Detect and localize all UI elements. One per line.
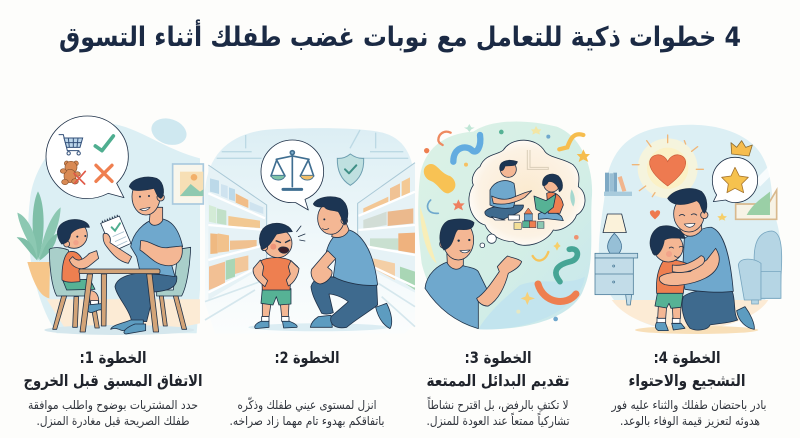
- step 1 heading: الخطوة 1:: [80, 348, 146, 367]
- icon: balance scale: [271, 151, 314, 189]
- step 3 text: [426, 348, 570, 429]
- toy blocks: [514, 208, 544, 229]
- step 4 heading: الخطوة 4:: [654, 348, 720, 367]
- decorative squiggles and stars: [424, 124, 590, 321]
- figure: father hugging: [668, 189, 754, 330]
- floor lines: [205, 282, 415, 327]
- step 4 description line 1: بادر باحتضان طفلك والثناء عليه فور: [611, 398, 766, 413]
- plant: [17, 191, 61, 298]
- small plant: [570, 189, 575, 207]
- ceiling lights: [217, 130, 408, 158]
- dresser: [595, 253, 638, 305]
- crown: [731, 141, 752, 156]
- figure: child hugging: [650, 226, 687, 331]
- left shelves: [208, 165, 267, 300]
- figure: father: [111, 177, 183, 334]
- small cloud blob: [148, 114, 190, 149]
- armchair: [738, 231, 782, 304]
- shout marks: [297, 226, 305, 241]
- step 2 description line 2: باتفاقكم بهدوء تام مهما زاد صراخه.: [230, 414, 384, 429]
- notepad: [101, 215, 132, 263]
- background blob: [599, 125, 781, 330]
- floor shadow: [248, 323, 388, 331]
- icon: teddy bear: [60, 161, 80, 185]
- chairs: [49, 247, 191, 329]
- icon: cart: [59, 135, 83, 155]
- figure: father seated: [485, 160, 532, 220]
- background blob: [28, 123, 200, 333]
- lamp: [603, 214, 626, 253]
- thought bubble: [469, 140, 585, 245]
- child's arm over father's shoulder: [672, 256, 705, 273]
- window in thought: [527, 150, 548, 169]
- step 1 subheading: الاتفاق المسبق قبل الخروج: [24, 371, 202, 390]
- father's arm around child: [659, 248, 719, 285]
- table: [79, 269, 160, 332]
- small thought circles: [480, 234, 496, 248]
- figure: angry child: [253, 223, 305, 329]
- step 3 heading: الخطوة 3:: [464, 348, 532, 367]
- icon: check: [95, 136, 113, 151]
- panel: step 2 illustration: [205, 128, 415, 333]
- step 3 description line 2: تشاركياً ممتعاً عند العودة للمنزل.: [426, 412, 570, 429]
- shadow: [44, 325, 194, 335]
- step 4 description line 2: هدوئه لتعزيز قيمة الوفاء بالوعد.: [620, 414, 760, 429]
- floor: [612, 300, 768, 330]
- step 3 description line 1: لا تكتفِ بالرفض، بل اقترح نشاطاً: [427, 396, 568, 413]
- step 2 description line 1: انزل لمستوى عيني طفلك وذكّره: [238, 396, 376, 413]
- background supermarket aisle: [205, 128, 415, 333]
- speech bubble with star: [712, 157, 758, 203]
- wall picture: [173, 164, 203, 204]
- floor shadow: [635, 326, 758, 334]
- step 2 heading: الخطوة 2:: [274, 348, 340, 367]
- panel: step 3 illustration: [418, 121, 592, 329]
- figure: girl with book: [534, 174, 563, 221]
- small heart: [650, 210, 660, 219]
- step 4 text: [611, 348, 766, 429]
- step 2 text: [230, 348, 384, 429]
- title: 4 خطوات ذكية للتعامل مع نوبات غضب طفلك أثناء التسوق: [59, 19, 741, 53]
- step 1 description line 1: حدد المشتريات بوضوح واطلب موافقة: [28, 398, 198, 413]
- icon: cross: [96, 165, 112, 181]
- small star: [717, 213, 727, 221]
- step 1 description line 2: طفلك الصريحة قبل مغادرة المنزل.: [36, 414, 190, 429]
- panel: step 4 illustration: [595, 125, 782, 334]
- panel: step 1 illustration: [17, 114, 203, 335]
- background blob: [418, 121, 592, 329]
- figure: father kneeling: [310, 197, 392, 329]
- icon: shield: [337, 154, 364, 185]
- speech bubble with scale: [261, 140, 324, 210]
- step 4 subheading: التشجيع والاحتواء: [628, 371, 746, 390]
- floor: [47, 299, 200, 331]
- step 1 text: [24, 348, 202, 429]
- bookshelf: [604, 173, 632, 196]
- window: [736, 165, 777, 219]
- heart with glow: [632, 135, 703, 198]
- speech bubble: [46, 116, 128, 199]
- figure: father gesturing: [425, 219, 522, 329]
- right shelves: [358, 163, 415, 293]
- figure: child: [57, 220, 105, 313]
- step 3 subheading: تقديم البدائل الممتعة: [426, 371, 570, 390]
